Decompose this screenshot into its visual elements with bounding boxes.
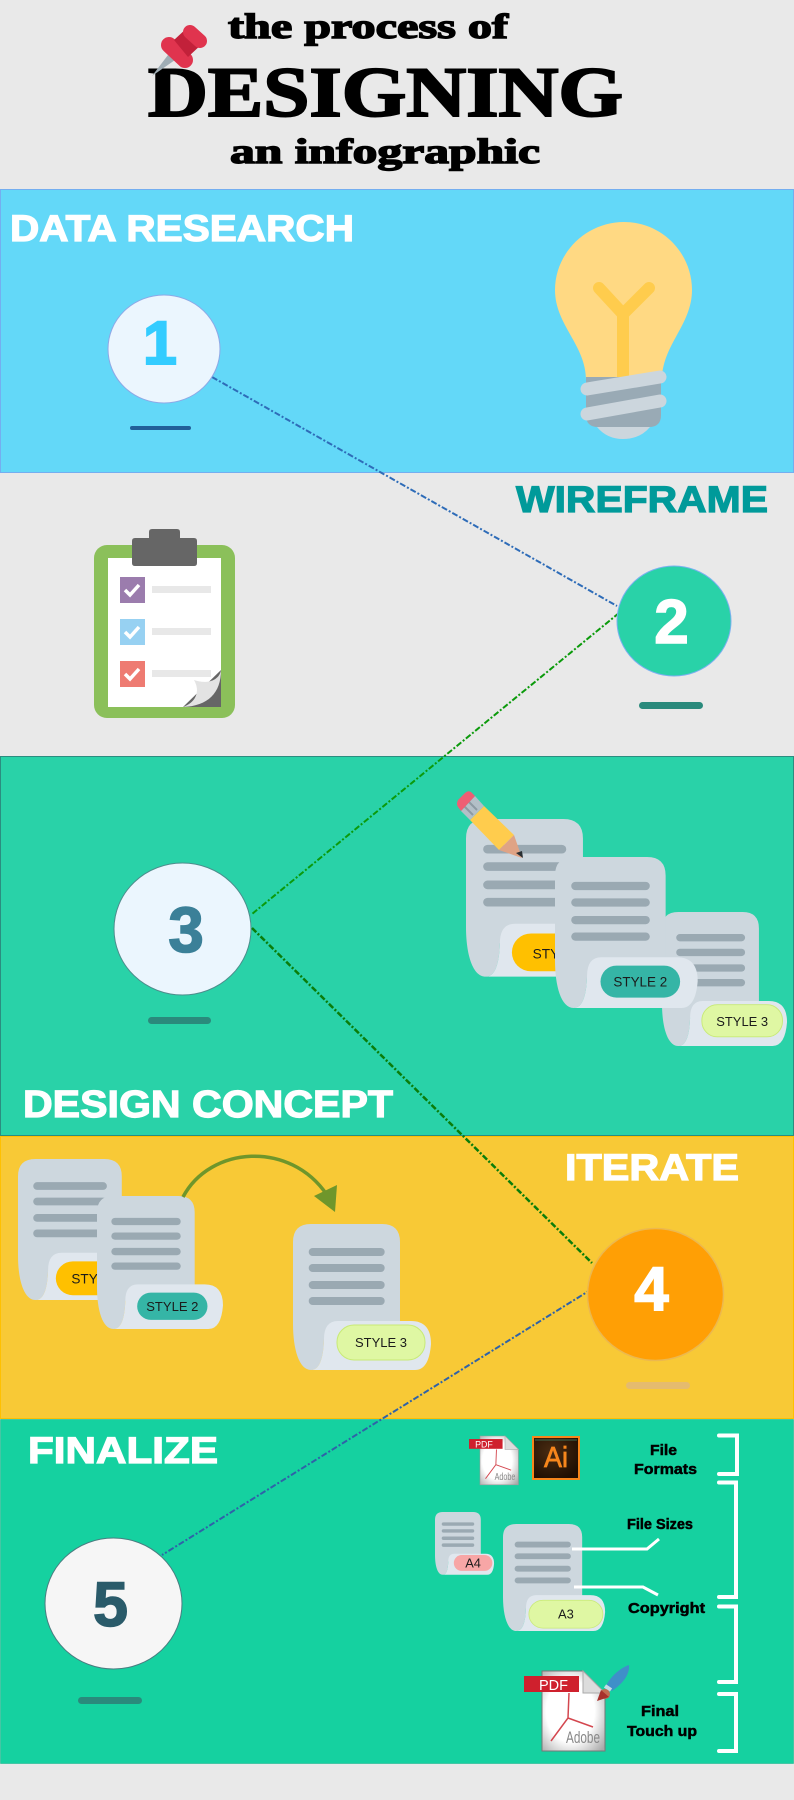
- icon: pencil: [457, 791, 523, 858]
- label: copyright: Copyright: [628, 1600, 705, 1617]
- step 4 marker: [588, 1228, 724, 1389]
- connector: step 3 to step 4: [252, 928, 592, 1263]
- connector: step 4 to step 5: [162, 1289, 592, 1555]
- label: final touch up: [627, 1703, 697, 1740]
- document: style 3: STYLE 3: [716, 1014, 768, 1029]
- step 3 marker: 3: [168, 894, 204, 966]
- document: style 2: [97, 1196, 223, 1329]
- step 2 marker: 2: [654, 588, 689, 657]
- document: A4: A4: [465, 1555, 481, 1570]
- heading: design concept: DESIGN CONCEPT: [23, 1084, 393, 1126]
- bracket: file formats: [719, 1436, 737, 1474]
- step 5 marker: [45, 1538, 182, 1704]
- title line: DESIGNING: DESIGNING: [148, 54, 623, 132]
- icon: small PDF file: Adobe: [495, 1472, 516, 1483]
- arrow: curved: [183, 1156, 337, 1212]
- step 1 marker: 1: [143, 309, 177, 377]
- panel: finalize: [0, 1420, 794, 1764]
- title line: an infographic: an infographic: [230, 132, 540, 171]
- leader line: file sizes: [572, 1539, 659, 1549]
- panel: data research: [0, 190, 794, 472]
- title: [148, 7, 623, 171]
- document: style 1: [466, 819, 617, 977]
- document: A3: [503, 1524, 605, 1631]
- step 1 marker: [108, 295, 220, 430]
- panel: wireframe: [0, 473, 794, 756]
- label: file formats: [634, 1442, 697, 1478]
- title line: the process of: the process of: [228, 7, 508, 46]
- icon: clipboard checklist: [94, 529, 235, 718]
- label: final touch up: Final: [641, 1703, 679, 1720]
- heading: iterate: ITERATE: [565, 1147, 739, 1188]
- label: file formats: File: [650, 1442, 677, 1459]
- document: style 3: STYLE 3: [355, 1335, 407, 1350]
- document: style 3: [293, 1224, 431, 1370]
- panel: design concept: [0, 756, 794, 1136]
- icon: paint brush: [597, 1665, 629, 1701]
- label: file sizes: File Sizes: [627, 1516, 693, 1533]
- document: style 2: STYLE 2: [146, 1299, 198, 1314]
- document: style 2: STYLE 2: [613, 974, 667, 989]
- bracket: file sizes: [719, 1482, 736, 1597]
- panel: iterate: [0, 1136, 794, 1418]
- heading: data research: DATA RESEARCH: [10, 208, 354, 249]
- document: style 1: STYLE 1: [71, 1272, 126, 1287]
- step 3 marker: [114, 863, 251, 1024]
- icon: light bulb: [555, 222, 692, 439]
- step 4 marker: 4: [634, 1255, 669, 1324]
- heading: finalize: FINALIZE: [28, 1430, 218, 1471]
- icon: large PDF file: [524, 1671, 605, 1751]
- icon: Illustrator file: Ai: [544, 1442, 568, 1474]
- document: style 1: STYLE 1: [533, 946, 587, 961]
- icon: small PDF file: [469, 1436, 518, 1485]
- label: final touch up: Touch up: [627, 1723, 697, 1740]
- connector: step 2 to step 3: [252, 613, 619, 914]
- document: style 3: [662, 912, 787, 1046]
- heading: wireframe: WIREFRAME: [516, 479, 768, 520]
- label: file formats: Formats: [634, 1461, 697, 1478]
- icon: Illustrator file: [533, 1437, 579, 1479]
- bracket: final touch up: [719, 1694, 736, 1751]
- document: A4: [435, 1512, 494, 1575]
- connector: step 1 to step 2: [212, 377, 617, 606]
- document: style 1: [18, 1159, 152, 1300]
- icon: large PDF file: Adobe: [566, 1728, 600, 1747]
- leader line: copyright: [574, 1587, 658, 1595]
- icon: small PDF file: PDF: [475, 1440, 493, 1450]
- document: A3: A3: [558, 1607, 574, 1622]
- icon: large PDF file: PDF: [539, 1677, 568, 1694]
- step 5 marker: 5: [93, 1570, 128, 1640]
- step 2 marker: [617, 566, 731, 709]
- bracket: copyright: [719, 1606, 736, 1682]
- icon: push pin: [152, 27, 203, 76]
- document: style 2: [555, 857, 698, 1008]
